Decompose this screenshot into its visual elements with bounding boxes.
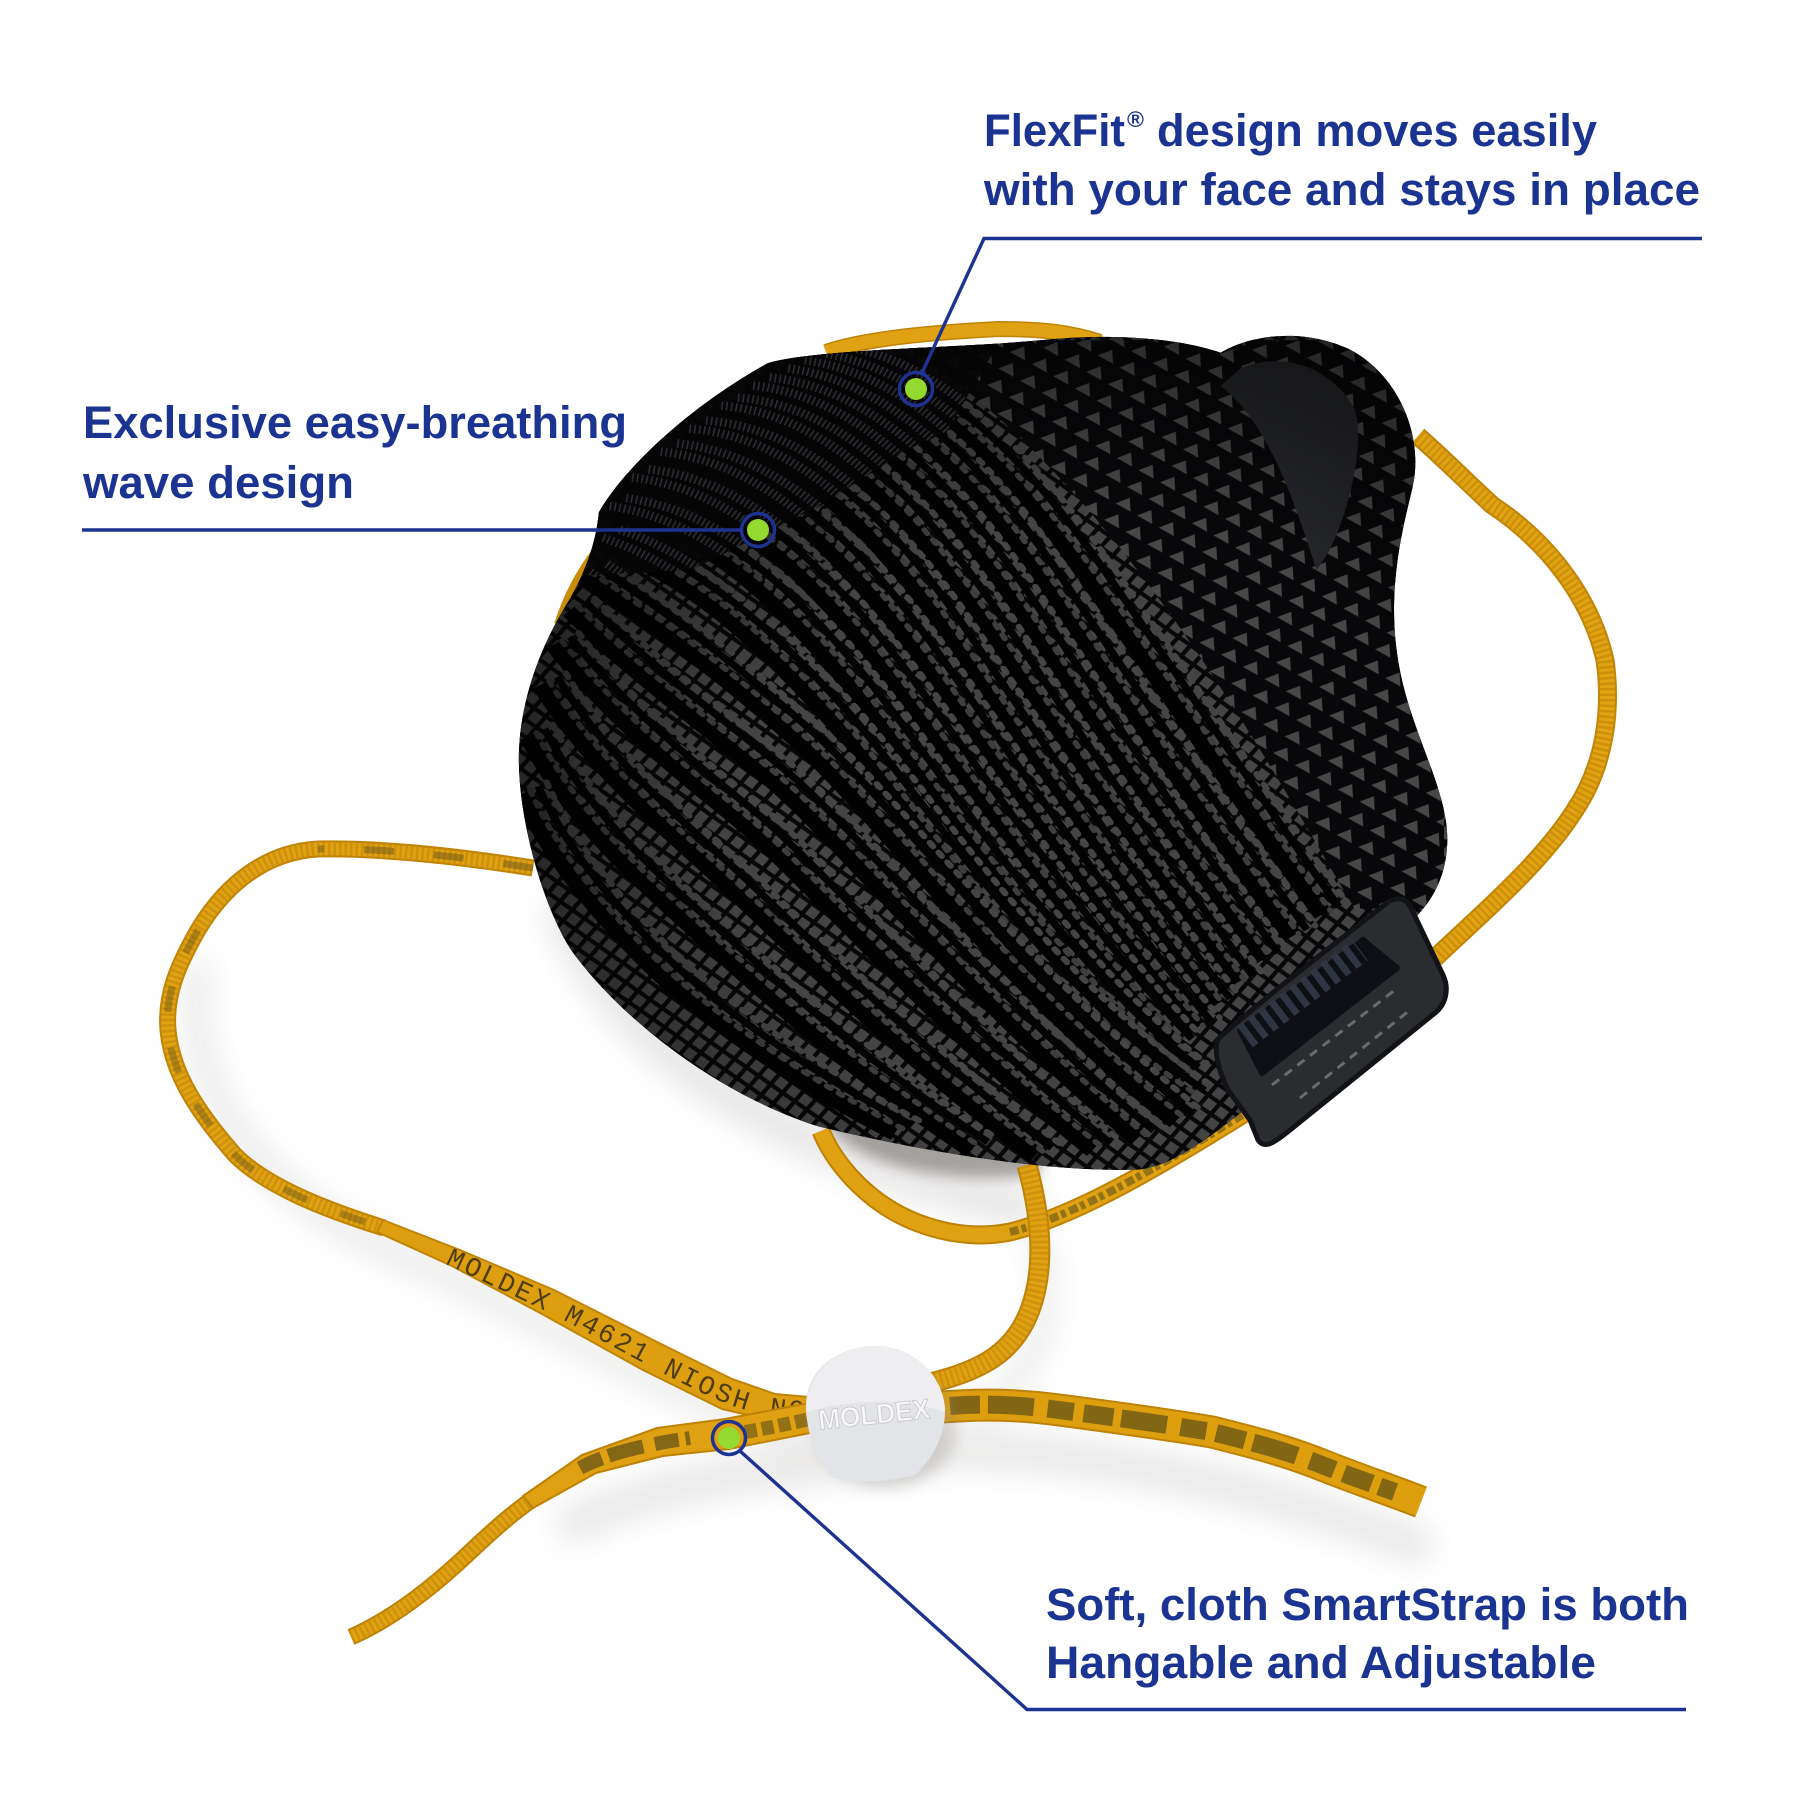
heading line 1: FlexFit [984, 105, 1125, 156]
folds [522, 357, 1323, 1155]
leader line [82, 528, 742, 532]
dark ribbed band, upper left [582, 344, 998, 576]
adjuster button [806, 1346, 957, 1488]
adjuster slot [1240, 940, 1397, 1073]
callout: easy-breathing wave design [82, 397, 775, 546]
strap: lower loop [821, 1102, 1263, 1235]
scale texture [518, 336, 1448, 1170]
strap lettering: MOLDEX M4621 NIOSH N95: MOLDEX M4621 NIOSH N95 [446, 1248, 802, 1410]
callout: FlexFit design [900, 105, 1702, 406]
button lettering: MOLDEX [817, 1393, 932, 1436]
soft shadows [196, 900, 1430, 1550]
edge shading [518, 336, 1416, 1134]
heading line 1: design moves easily [1157, 105, 1597, 156]
shadow under mask [830, 1110, 1040, 1178]
heading line 2: Hangable and Adjustable [1046, 1637, 1596, 1688]
leader line [740, 1451, 1686, 1710]
marker [742, 514, 774, 546]
heading line 1: ® [1127, 107, 1144, 132]
heading line 1: Soft, cloth SmartStrap is both [1046, 1579, 1689, 1630]
callout: SmartStrap [712, 1422, 1689, 1710]
strap: wide printed section [377, 1220, 820, 1422]
heading line 1: Exclusive easy-breathing [83, 397, 627, 448]
heading line 2: wave design [82, 457, 354, 508]
marker [712, 1422, 746, 1454]
strap: top of head loop [560, 329, 1100, 625]
triangular scales on the upper right [895, 340, 1444, 908]
strap: left long loop [168, 849, 820, 1422]
strap: vertical section [930, 1165, 1040, 1383]
adjuster tab on the mask [1216, 899, 1446, 1145]
tab highlights [1272, 990, 1410, 1098]
mask base [518, 336, 1448, 1170]
ridge scales [530, 354, 1330, 1152]
heading line 2: with your face and stays in place [983, 164, 1700, 215]
strap: crossing strap with adjuster ends [351, 1402, 1421, 1637]
mask body [518, 336, 1448, 1170]
leader line [922, 238, 1702, 373]
button disc [806, 1346, 945, 1482]
slot ribs [1245, 950, 1360, 1037]
strap: right loop [1418, 436, 1607, 958]
nose ear smooth area [1221, 361, 1358, 570]
marker [900, 372, 932, 406]
button shadow [813, 1368, 957, 1488]
